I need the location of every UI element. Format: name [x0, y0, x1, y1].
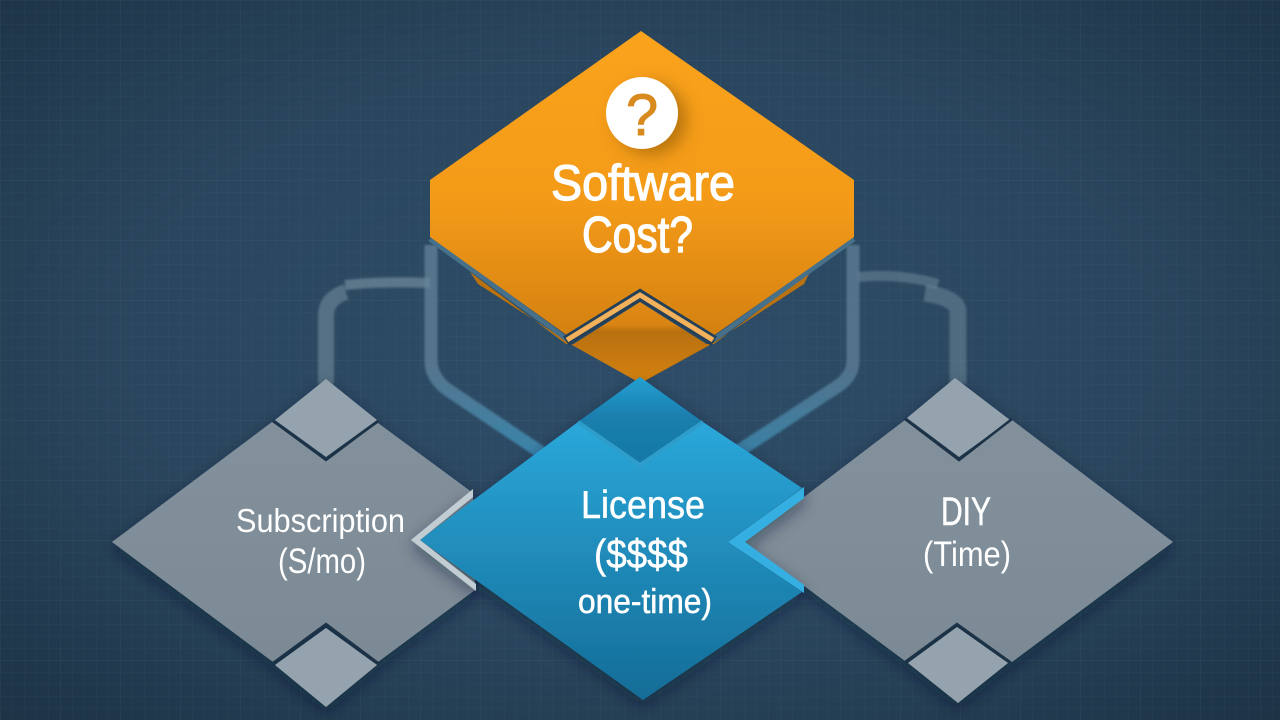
- arrow: left outer connector to Subscription: [326, 282, 430, 384]
- subscription top tab: [275, 379, 377, 457]
- orange chevron: [566, 295, 714, 341]
- subscription label: Subscription: [236, 502, 405, 539]
- license label: one-time): [578, 583, 712, 621]
- panel: Subscription diamond: [112, 379, 475, 707]
- orange lower back edge: [470, 272, 810, 383]
- license right chevron: [728, 487, 804, 593]
- DIY label: [923, 490, 1011, 574]
- heading: Software Cost?: [551, 155, 735, 263]
- arrow: left inner connector to License: [431, 245, 545, 455]
- heading: Software Cost?: Cost?: [582, 206, 693, 263]
- panel: License diamond: [411, 377, 804, 700]
- orange edge highlight: [430, 239, 854, 340]
- license top tab: [578, 377, 703, 463]
- subscription main shape: [112, 422, 475, 662]
- subscription label: (S/mo): [278, 542, 366, 581]
- icon: question mark circle: [606, 77, 678, 149]
- arrow: right outer connector to DIY: [858, 276, 958, 384]
- DIY label: DIY: [941, 490, 991, 534]
- heading: Software Cost?: Software: [551, 155, 735, 211]
- subscription label: [236, 502, 405, 581]
- subscription bottom tab: [275, 628, 377, 707]
- DIY label: (Time): [923, 535, 1011, 574]
- license label: [578, 484, 712, 621]
- panel: orange decision diamond: [430, 31, 854, 383]
- orange main shape: [430, 31, 854, 336]
- DIY main shape: [745, 420, 1173, 662]
- orange lower tip: [572, 302, 708, 383]
- license notch highlight: [578, 422, 703, 465]
- DIY notch lines: [905, 419, 1012, 662]
- DIY top tab: [907, 378, 1010, 457]
- license main shape: [420, 422, 802, 700]
- license label: ($$$$: [594, 531, 688, 577]
- icon: question mark circle: ?: [626, 83, 658, 148]
- subscription notch lines: [273, 421, 378, 663]
- DIY bottom tab: [908, 627, 1008, 703]
- license left silver chevron: [411, 489, 476, 591]
- license label: License: [581, 484, 705, 527]
- panel: DIY diamond: [745, 378, 1173, 703]
- arrow: right inner connector to License: [725, 245, 853, 460]
